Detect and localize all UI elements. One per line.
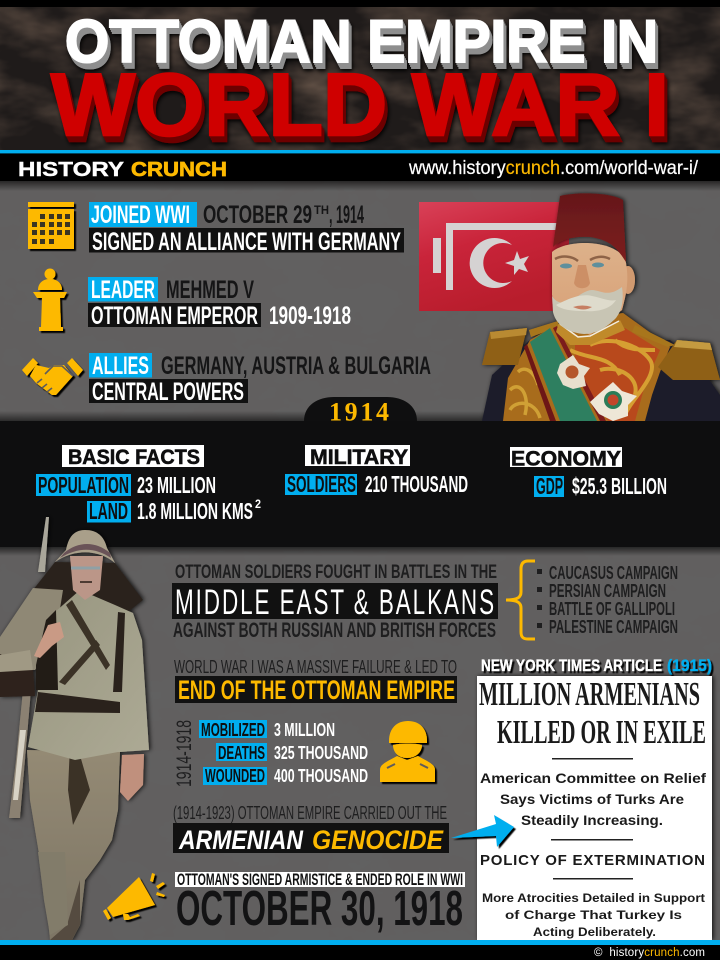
column: basic facts: 1.8 MILLION KMS bbox=[137, 498, 253, 524]
collar bbox=[556, 320, 625, 345]
panel: Armenian genocide bbox=[173, 803, 449, 855]
panel: newspaper article: Acting Deliberately. bbox=[533, 927, 656, 939]
portrait: Sultan Mehmed V bbox=[482, 193, 720, 421]
panel: casualty stats bbox=[173, 720, 368, 787]
head bbox=[70, 556, 103, 600]
panel: joined WWI bbox=[28, 201, 404, 256]
panel: footer bar bbox=[0, 940, 720, 960]
medals bbox=[557, 355, 590, 389]
icon: soldier with helmet bbox=[380, 721, 435, 782]
trousers bbox=[27, 750, 120, 940]
hands bbox=[34, 622, 64, 658]
column: basic facts: POPULATION bbox=[38, 472, 129, 498]
panel: leader: 1909-1918 bbox=[269, 302, 351, 330]
panel: armistice date: OTTOMAN'S SIGNED ARMISTICE & ENDED ROLE IN WWI bbox=[177, 870, 463, 889]
bedroll bbox=[0, 588, 63, 670]
website url: www.historycrunch.com/world-war-i/ bbox=[408, 158, 699, 179]
panel: battles text: MIDDLE EAST & BALKANS bbox=[175, 583, 496, 622]
dark coat bbox=[482, 340, 720, 421]
column: military: MILITARY bbox=[310, 445, 408, 469]
ear bbox=[621, 266, 635, 294]
panel: allies: ALLIES bbox=[92, 352, 149, 380]
vertical years label: 1914-1918 bbox=[173, 720, 196, 787]
campaign list bbox=[537, 562, 678, 637]
copyright: © historycrunch.com bbox=[594, 947, 705, 959]
face bbox=[552, 243, 627, 335]
title line one: OTTOMAN EMPIRE IN bbox=[65, 8, 658, 75]
column: basic facts: 23 MILLION bbox=[137, 472, 216, 498]
icon: calendar bbox=[28, 202, 74, 249]
epaulette right bbox=[658, 340, 720, 380]
rifle bbox=[38, 517, 49, 572]
panel: newspaper article: More Atrocities Detailed in Support bbox=[482, 893, 705, 905]
column: economy: GDP bbox=[536, 473, 563, 499]
panel: leader: OTTOMAN EMPEROR bbox=[91, 302, 258, 330]
panel: battles text: AGAINST BOTH RUSSIAN AND BRITISH FORCES bbox=[173, 619, 496, 642]
column: basic facts bbox=[36, 445, 261, 524]
neck cloth bbox=[33, 562, 143, 612]
brand logo: HISTORY bbox=[18, 159, 125, 181]
panel: leader: LEADER bbox=[91, 276, 155, 304]
icon: handshake bbox=[22, 358, 83, 395]
fez hat bbox=[553, 193, 626, 262]
panel: armistice date bbox=[175, 870, 465, 936]
column: military bbox=[285, 445, 468, 497]
panel: black stats band bbox=[0, 421, 720, 547]
panel: Armenian genocide: ARMENIAN bbox=[178, 825, 303, 855]
panel: casualty stats: 3 MILLION bbox=[274, 720, 335, 740]
panel: casualty stats: MOBILIZED bbox=[201, 720, 265, 740]
panel: brand bar bbox=[0, 150, 720, 181]
tunic bbox=[28, 590, 149, 760]
icon: yellow brace bbox=[506, 561, 535, 639]
panel: newspaper article: of Charge That Turkey Is bbox=[505, 910, 682, 922]
panel: newspaper article: Steadily Increasing. bbox=[521, 812, 663, 828]
gold embroidered chest bbox=[503, 313, 670, 421]
panel: casualty stats: 400 THOUSAND bbox=[274, 766, 368, 786]
beard bbox=[552, 287, 623, 334]
panel: end of the empire: END OF THE OTTOMAN EMPIRE bbox=[178, 675, 455, 705]
year tab 1914 bbox=[304, 397, 417, 426]
panel: leader: MEHMED V bbox=[166, 276, 254, 304]
pith helmet bbox=[55, 530, 115, 563]
panel: casualty stats: DEATHS bbox=[218, 743, 265, 763]
column: military: 210 THOUSAND bbox=[365, 471, 468, 497]
panel: casualty stats: 325 THOUSAND bbox=[274, 743, 368, 763]
panel: joined WWI: SIGNED AN ALLIANCE WITH GERMANY bbox=[92, 228, 401, 256]
column: military: SOLDIERS bbox=[287, 471, 356, 497]
panel: joined WWI: , 1914 bbox=[329, 201, 364, 229]
panel: joined WWI: JOINED WWI bbox=[91, 201, 190, 229]
panel: end of the empire bbox=[174, 657, 457, 705]
panel: allies: CENTRAL POWERS bbox=[92, 378, 244, 406]
panel: battles text bbox=[172, 562, 498, 642]
panel: allies: GERMANY, AUSTRIA & BULGARIA bbox=[161, 352, 431, 380]
article heading: (1915) bbox=[667, 656, 712, 675]
panel: newspaper article: POLICY OF EXTERMINATION bbox=[480, 852, 705, 869]
column: basic facts: 2 bbox=[255, 497, 261, 511]
panel: armistice date: OCTOBER 30, 1918 bbox=[176, 882, 463, 936]
column: basic facts: BASIC FACTS bbox=[68, 445, 200, 469]
year tab 1914: 1914 bbox=[329, 398, 389, 426]
column: basic facts: LAND bbox=[89, 498, 128, 524]
panel: end of the empire: WORLD WAR I WAS A MASSIVE FAILURE & LED TO bbox=[174, 657, 457, 677]
title line two: WORLD WAR I bbox=[51, 55, 669, 154]
panel: newspaper article: Says Victims of Turks Are bbox=[500, 791, 684, 807]
panel: leader bbox=[33, 268, 351, 331]
brand logo bbox=[18, 159, 227, 181]
figure: Ottoman soldier bbox=[0, 517, 149, 940]
brand logo: CRUNCH bbox=[131, 159, 227, 181]
panel: title header bbox=[0, 0, 720, 154]
icon: megaphone bbox=[103, 873, 165, 920]
panel: newspaper article: American Committee on Relief bbox=[480, 770, 706, 786]
panel: joined WWI: OCTOBER 29 bbox=[203, 201, 312, 229]
column: economy bbox=[510, 446, 667, 499]
panel: allies bbox=[22, 352, 431, 406]
article heading: NEW YORK TIMES ARTICLE bbox=[481, 656, 662, 675]
green sash bbox=[530, 328, 597, 421]
panel: Armenian genocide: (1914-1923) OTTOMAN EMPIRE CARRIED OUT THE bbox=[173, 803, 447, 823]
flag: Ottoman bbox=[419, 202, 569, 311]
panel: Armenian genocide: GENOCIDE bbox=[312, 825, 444, 855]
panel: casualty stats: WOUNDED bbox=[205, 766, 265, 786]
panel: joined WWI: TH bbox=[314, 203, 329, 217]
eyes and brows bbox=[555, 257, 610, 261]
arrow: points to article bbox=[451, 815, 514, 847]
icon: podium speaker bbox=[33, 268, 67, 331]
panel: battles text: OTTOMAN SOLDIERS FOUGHT IN BATTLES IN THE bbox=[175, 562, 497, 583]
epaulette left bbox=[482, 328, 527, 365]
panel: newspaper article bbox=[477, 656, 712, 940]
column: economy: ECONOMY bbox=[511, 446, 621, 470]
